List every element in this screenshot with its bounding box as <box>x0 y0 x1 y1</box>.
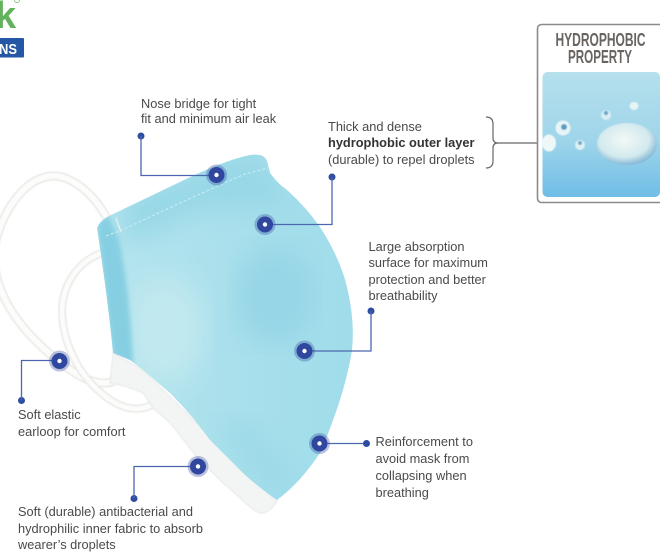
text: absorption surface: breathability <box>368 288 438 303</box>
text: inner fabric: wearer’s droplets <box>17 537 116 552</box>
text: outer layer: hydrophobic outer layer <box>328 135 474 150</box>
text: earloop: earloop for comfort <box>18 424 126 439</box>
earloops <box>0 176 150 409</box>
text: reinforcement: Reinforcement to <box>376 434 473 449</box>
text: reinforcement: collapsing when <box>376 468 467 483</box>
face mask <box>90 150 360 513</box>
callout: hydrophobic outer layer <box>254 119 475 235</box>
text: inner fabric: hydrophilic inner fabric to absorb <box>18 521 203 536</box>
text: inner fabric: Soft (durable) antibacterial and <box>18 504 193 519</box>
text: absorption surface: protection and better <box>368 272 487 287</box>
text: reinforcement: avoid mask from <box>376 451 469 466</box>
text: absorption surface: surface for maximum <box>368 255 488 270</box>
callout: absorption surface <box>294 239 488 362</box>
text: nose bridge: fit and minimum air leak <box>141 111 277 126</box>
bracket connector to hydrophobic panel <box>486 117 537 168</box>
blue outer layer <box>90 150 360 510</box>
callout: nose bridge <box>138 96 277 186</box>
callout: inner fabric <box>17 456 208 552</box>
text: outer layer: Thick and dense <box>328 119 422 134</box>
text: reinforcement: breathing <box>376 485 429 500</box>
text: outer layer: (durable) to repel droplets <box>328 152 475 167</box>
callout: reinforcement <box>309 433 473 500</box>
panel: hydrophobic property <box>538 24 660 202</box>
stitching <box>106 168 268 236</box>
text: earloop: Soft elastic <box>18 407 81 422</box>
text: absorption surface: Large absorption <box>368 239 465 254</box>
text: nose bridge: Nose bridge for tight <box>141 96 256 111</box>
white inner fabric strip <box>110 353 277 513</box>
logo: partial brand mark <box>0 0 24 58</box>
callout: earloop <box>18 350 126 439</box>
image: droplets on fabric <box>542 72 660 197</box>
